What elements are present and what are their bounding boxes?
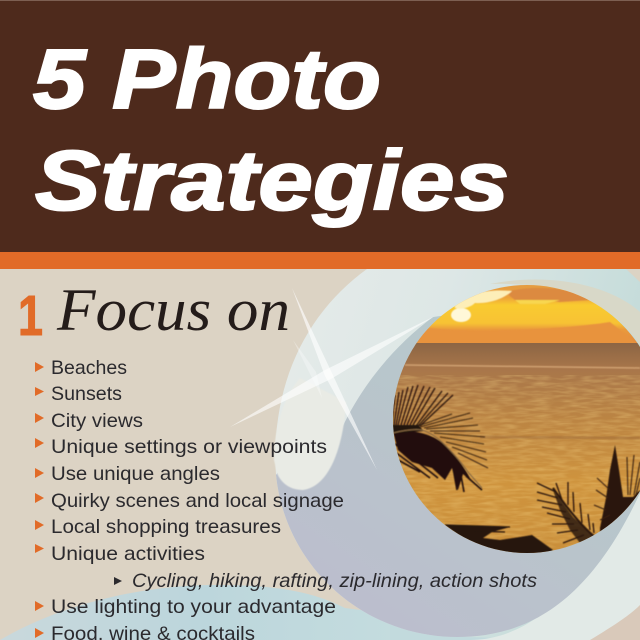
item: quirky scenes: Quirky scenes and local signage: [51, 490, 344, 512]
header band: [0, 0, 640, 252]
title: Strategies: [35, 134, 509, 228]
palm: bottom frond: [444, 524, 554, 553]
decorative background swirls: [0, 269, 640, 640]
sea ripple texture: [390, 375, 640, 558]
sunset photo circle: [390, 283, 640, 560]
sparkle star: [230, 288, 435, 470]
title: 5 Photo: [33, 32, 381, 126]
bullet list: [35, 357, 537, 640]
item: unique activities: Unique activities: [51, 543, 205, 565]
item: city views: City views: [51, 410, 143, 432]
white glow blob: [274, 378, 346, 490]
title: [33, 32, 509, 228]
item: local shopping: Local shopping treasures: [51, 516, 281, 538]
item: unique settings: Unique settings or viewpoints: [51, 436, 327, 458]
clouds and sun: [400, 288, 640, 346]
sky: [416, 285, 638, 344]
sea: [390, 343, 640, 558]
item: sunsets: Sunsets: [51, 383, 122, 405]
section title: Focus on: [56, 277, 290, 343]
sub-item: activities examples: Cycling, hiking, rafting, zip-lining, action shots: [132, 570, 537, 592]
section heading: [18, 277, 290, 348]
accent stripe: [0, 252, 640, 269]
item: lighting: Use lighting to your advantage: [51, 596, 336, 618]
beige background panel: [0, 269, 640, 640]
palm: left frond: [392, 385, 488, 492]
section number: 1: [18, 284, 43, 348]
sea highlights: [405, 365, 640, 438]
palm: right fronds: [537, 445, 640, 543]
item: unique angles: Use unique angles: [51, 463, 220, 485]
item: beaches: Beaches: [51, 357, 127, 379]
